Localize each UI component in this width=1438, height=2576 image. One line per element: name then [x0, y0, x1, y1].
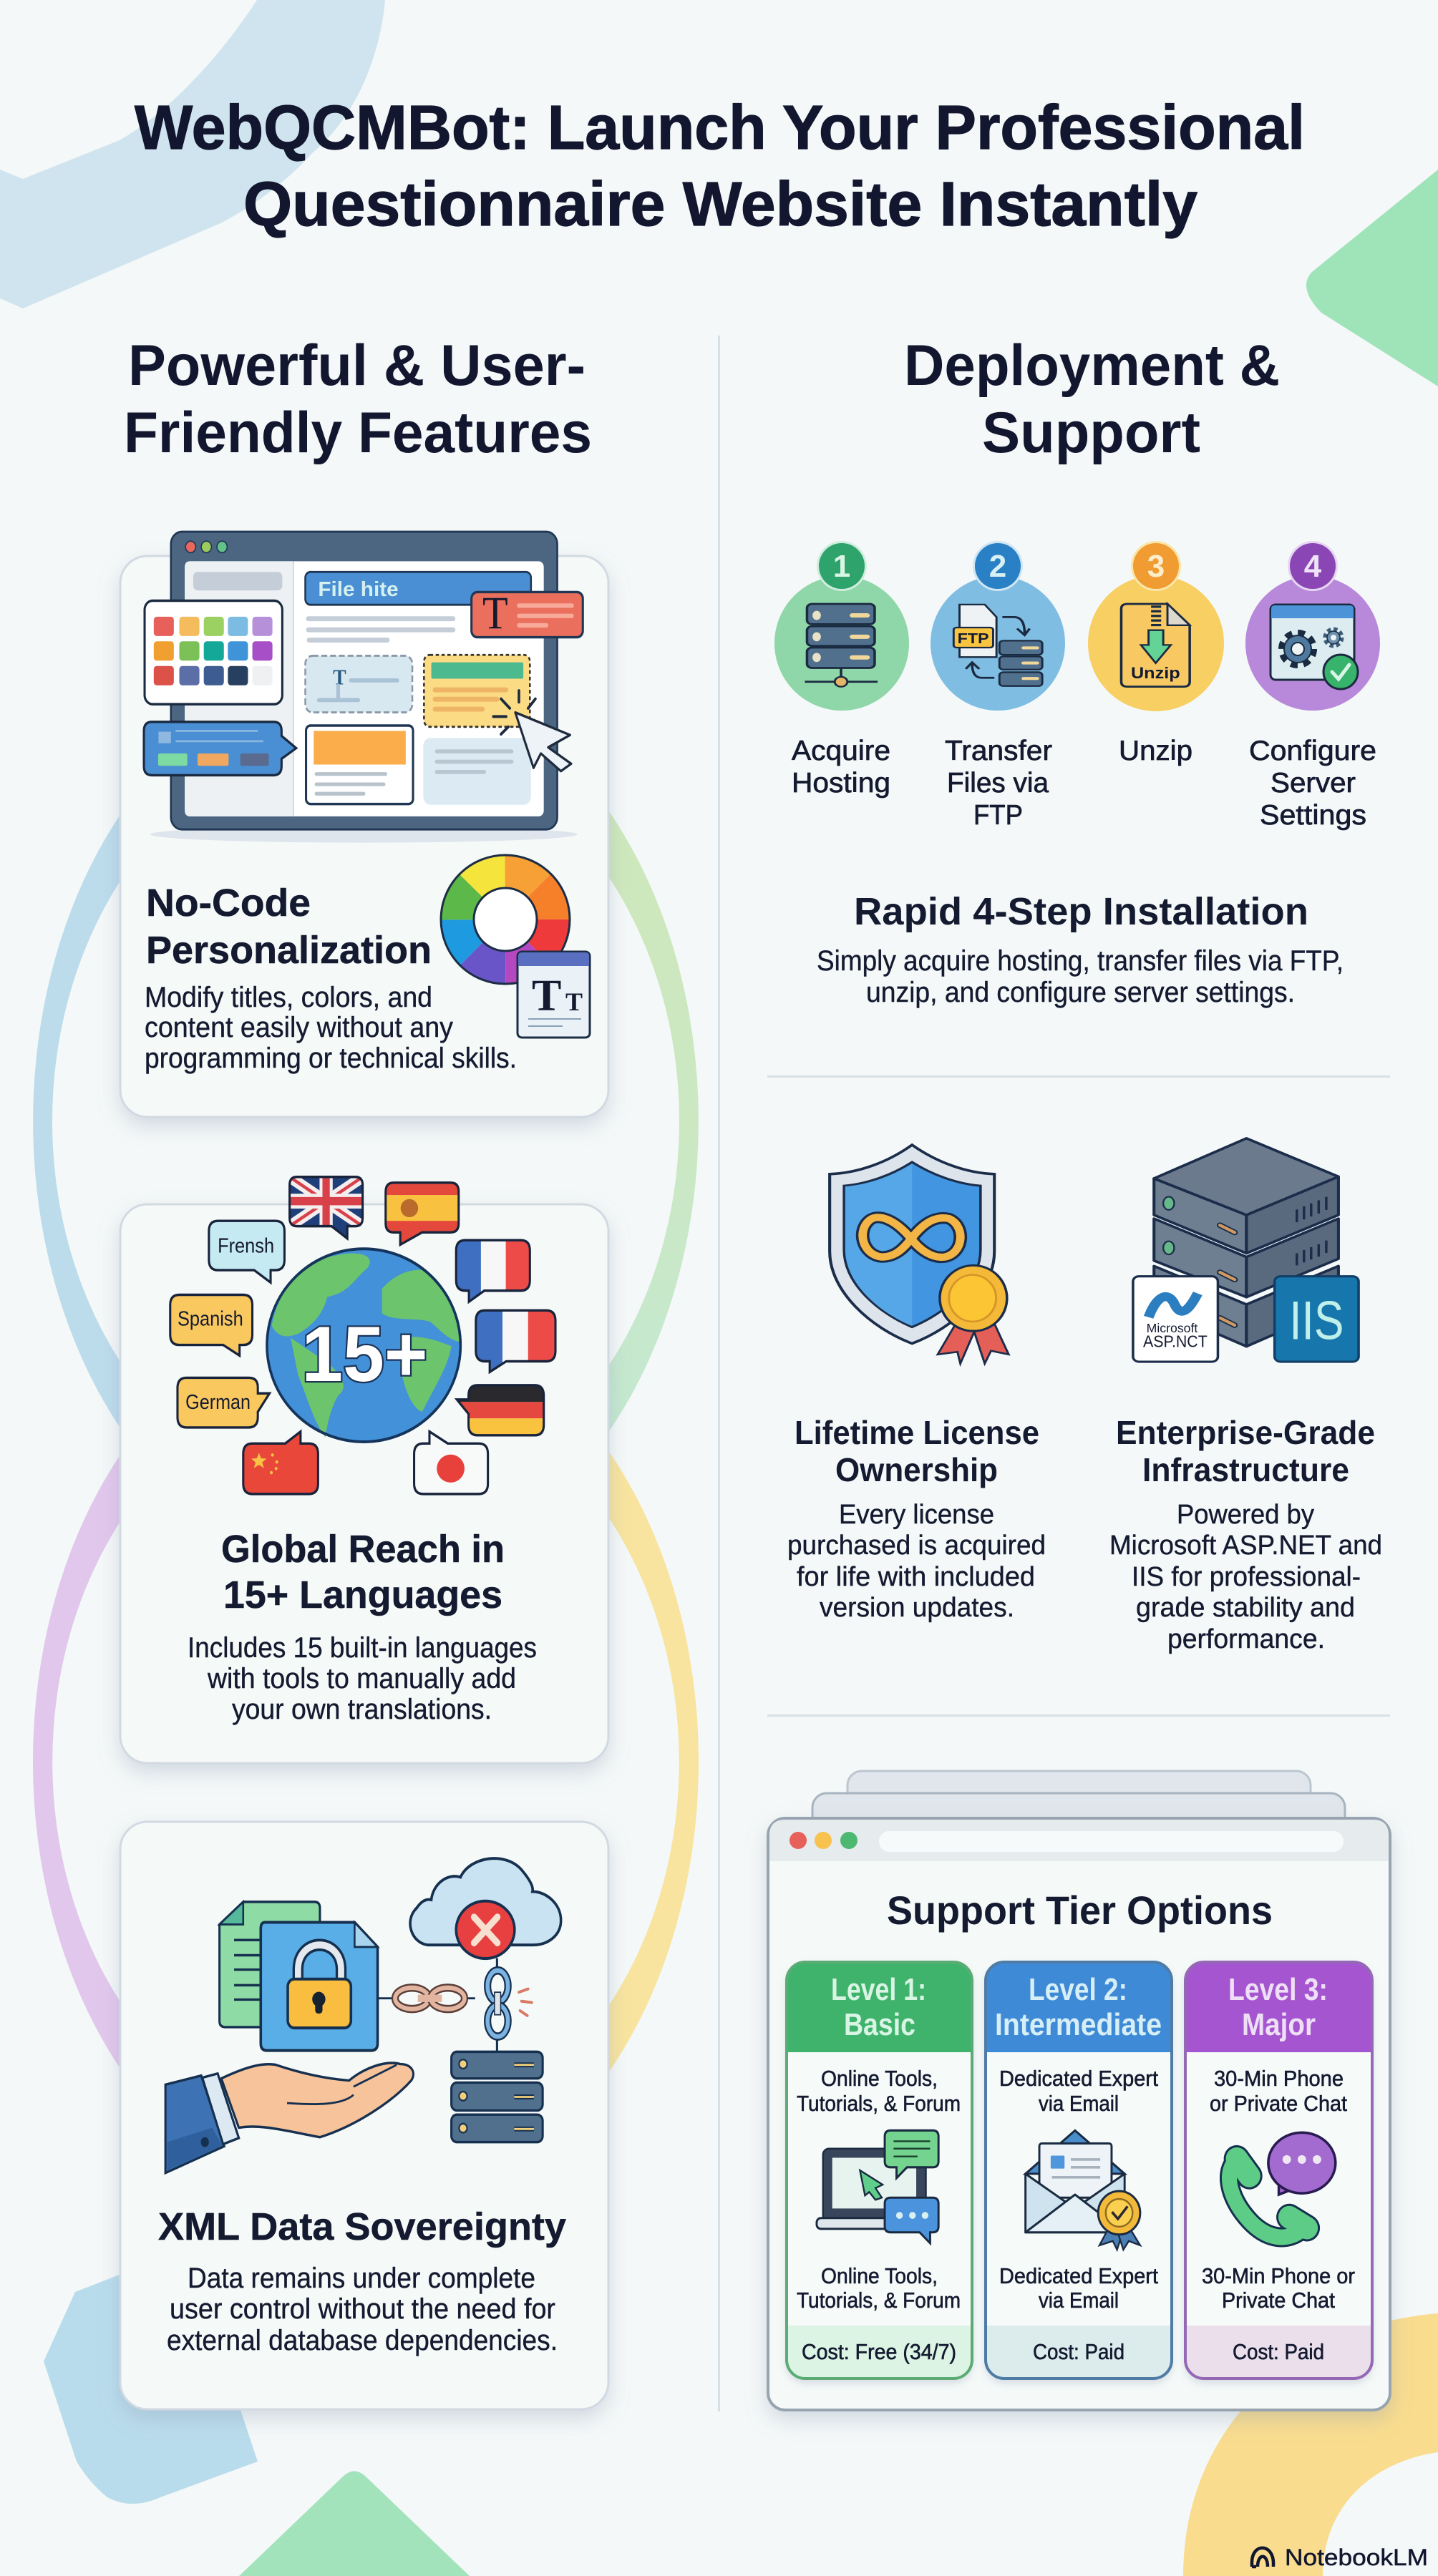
text: for life with included	[797, 1562, 1035, 1592]
illustration: browser editor: T	[333, 665, 346, 690]
text: IIS for professional-	[1132, 1562, 1361, 1592]
icon: settings window	[1271, 605, 1358, 689]
icon: green document	[220, 1902, 320, 2027]
icon: envelope with badge	[1026, 2130, 1140, 2250]
step circle	[931, 576, 1065, 711]
step badge	[817, 541, 867, 591]
bubble: Frensh: Frensh	[218, 1234, 274, 1257]
icon: locked blue document	[261, 1923, 378, 2051]
logo: ASP.NET: Microsoft	[1147, 1321, 1198, 1335]
bubble: Frensh	[209, 1221, 284, 1282]
icon: server stack with logos	[1133, 1138, 1359, 1362]
icon: FTP transfer: FTP	[958, 630, 989, 646]
card text: external database dependencies.	[167, 2325, 558, 2356]
card heading: No-Code	[146, 882, 311, 924]
icon: chain	[379, 1988, 475, 2009]
icon: FTP transfer	[953, 605, 1042, 686]
title	[135, 93, 1305, 239]
step badge	[1288, 541, 1338, 591]
card text	[188, 1632, 537, 1725]
tier text: Tutorials, & Forum	[797, 2091, 961, 2116]
enterprise infrastructure block	[1109, 1138, 1382, 1654]
browser title bar	[769, 1820, 1389, 1861]
icon: phone with chat	[1229, 2132, 1336, 2238]
text: Every license	[839, 1500, 994, 1530]
tier heading: Major	[1242, 2007, 1316, 2042]
step badge	[1131, 541, 1181, 591]
step label	[792, 736, 890, 799]
card heading: Global Reach in	[221, 1528, 505, 1571]
step label	[945, 736, 1052, 831]
heading: Support Tier Options	[887, 1888, 1273, 1933]
tier heading	[995, 1972, 1162, 2042]
step label	[1249, 736, 1376, 831]
tier text: Online Tools,	[821, 2066, 938, 2091]
bubble: German: German	[185, 1390, 251, 1413]
icon: vertical broken chain	[487, 1958, 532, 2051]
tier heading: Intermediate	[995, 2007, 1162, 2042]
tier text lower: 30-Min Phone or	[1202, 2263, 1355, 2288]
text: grade stability and	[1136, 1593, 1355, 1623]
step 1: acquire hosting	[774, 541, 909, 799]
tier text: 30-Min Phone	[1214, 2066, 1344, 2091]
icon: France flag bubble second	[476, 1310, 555, 1372]
browser back tabs	[812, 1771, 1345, 1843]
background shape: bottom-right yellow arc	[1183, 2313, 1438, 2576]
heading: left column: Powerful & User-	[128, 333, 586, 398]
tier text	[1210, 2066, 1347, 2116]
icon: server	[805, 604, 878, 687]
step label: Server	[1271, 768, 1356, 799]
tier 3: major	[1185, 1962, 1372, 2379]
icon: UK flag bubble	[290, 1177, 363, 1239]
step circle	[1245, 576, 1380, 711]
card text	[167, 2263, 558, 2356]
card heading: 15+ Languages	[223, 1574, 502, 1616]
card heading	[146, 882, 432, 972]
text: installation description	[817, 945, 1344, 1008]
step label: Files via	[947, 768, 1049, 799]
text	[1109, 1500, 1382, 1654]
tier heading: Level 3:	[1228, 1972, 1328, 2007]
step label: Hosting	[792, 768, 890, 799]
heading: Lifetime License	[795, 1414, 1039, 1451]
bubble: German	[178, 1377, 270, 1428]
step badge: 3	[1147, 549, 1165, 584]
illustration: browser editor: File hite	[318, 577, 399, 601]
icon: France flag bubble	[456, 1240, 530, 1302]
lifetime license block	[787, 1145, 1046, 1623]
card text	[145, 982, 517, 1074]
step label: Configure	[1249, 736, 1376, 766]
tier text: or Private Chat	[1210, 2091, 1347, 2116]
step badge: 2	[989, 549, 1006, 584]
icon: Japan flag bubble	[414, 1432, 488, 1494]
tier text lower: via Email	[1039, 2288, 1119, 2313]
card text: user control without the need for	[170, 2293, 555, 2325]
bubble: Spanish: Spanish	[178, 1307, 243, 1330]
icon: open hand	[165, 2063, 413, 2173]
tier heading: Level 2:	[1029, 1972, 1127, 2007]
card text: Data remains under complete	[188, 2263, 535, 2294]
card text: Includes 15 built-in languages	[188, 1632, 537, 1664]
icon: Spain flag bubble	[386, 1183, 459, 1244]
card text: content easily without any	[145, 1012, 453, 1043]
icon: globe: 15+	[301, 1311, 427, 1397]
illustration: browser editor: T	[482, 588, 508, 639]
tier cost: Cost: Free (34/7)	[802, 2339, 956, 2364]
heading: right column: Deployment &	[904, 333, 1280, 398]
icon: unzip file: Unzip	[1131, 665, 1180, 682]
tier text: via Email	[1039, 2091, 1119, 2116]
tier text lower: Online Tools,	[821, 2263, 938, 2288]
card heading: Personalization	[146, 929, 432, 972]
icon: unzip file	[1121, 604, 1190, 687]
step label: Unzip	[1119, 736, 1192, 766]
text: Powered by	[1177, 1500, 1314, 1530]
background shape: top-left blue band	[0, 0, 385, 308]
icon: typography window	[518, 952, 590, 1038]
step circle	[1088, 575, 1224, 711]
card text: programming or technical skills.	[145, 1043, 517, 1074]
step label: FTP	[973, 800, 1023, 831]
heading: right column	[904, 333, 1280, 465]
logo: ASP.NET: ASP.NCT	[1143, 1332, 1208, 1351]
icon: shield with medal	[830, 1145, 1009, 1364]
palette	[145, 600, 282, 704]
icon: server stack	[452, 2051, 543, 2142]
icon: typography window: T	[565, 987, 583, 1016]
logo: ASP.NET	[1133, 1277, 1218, 1362]
icon: color wheel	[441, 855, 570, 984]
tier text lower	[1202, 2263, 1355, 2313]
heading	[795, 1414, 1039, 1488]
panel: no-code personalization	[120, 532, 608, 1117]
text: version updates.	[820, 1593, 1014, 1623]
text: purchased is acquired	[787, 1531, 1046, 1561]
tier text	[999, 2066, 1158, 2116]
icon: Germany flag bubble	[457, 1385, 545, 1435]
background ring lower	[33, 1307, 699, 2216]
background shape: lower-left blue hexagon	[44, 2268, 258, 2504]
tier text lower: Private Chat	[1222, 2288, 1335, 2313]
heading: left column: Friendly Features	[124, 401, 592, 465]
heading: rapid installation: Rapid 4-Step Installation	[854, 890, 1308, 933]
panel: global reach	[120, 1177, 608, 1763]
text: installation description: Simply acquire hosting, transfer files via FTP,	[817, 945, 1344, 977]
tier heading: Basic	[844, 2007, 915, 2042]
heading: Infrastructure	[1142, 1451, 1349, 1488]
text: installation description: unzip, and configure server settings.	[866, 977, 1295, 1008]
tier heading: Level 1:	[831, 1972, 926, 2007]
tier heading	[831, 1972, 926, 2042]
settings speech bubble	[144, 722, 296, 775]
background shape: right green	[1306, 170, 1438, 386]
tier text lower	[797, 2263, 961, 2313]
logo: IIS	[1275, 1277, 1359, 1362]
background shape: bottom green triangle	[239, 2472, 470, 2576]
tier cost: Cost: Paid	[1233, 2339, 1324, 2364]
step label: Acquire	[792, 736, 890, 766]
background ring upper	[33, 667, 699, 1576]
text	[787, 1500, 1046, 1623]
step badge: 4	[1304, 549, 1322, 584]
heading: Ownership	[835, 1451, 998, 1488]
NotebookLM logo: NotebookLM	[1285, 2545, 1428, 2570]
step label: Settings	[1260, 800, 1366, 831]
card heading: XML Data Sovereignty	[158, 2205, 566, 2248]
icon: globe	[267, 1249, 460, 1442]
illustration: data locked in hand	[165, 1858, 561, 2173]
bubble: Spanish	[170, 1295, 253, 1355]
tier cost: Cost: Paid	[1033, 2339, 1124, 2364]
text: Microsoft ASP.NET and	[1109, 1531, 1382, 1561]
panel: XML data sovereignty	[120, 1822, 608, 2409]
heading	[1116, 1414, 1375, 1488]
step 3: unzip	[1088, 541, 1224, 766]
tier text	[797, 2066, 961, 2116]
tier 2: intermediate	[986, 1962, 1172, 2379]
heading: left column	[124, 333, 592, 465]
tier text lower: Tutorials, & Forum	[797, 2288, 961, 2313]
tier text lower: Dedicated Expert	[999, 2263, 1158, 2288]
heading: right column: Support	[982, 401, 1200, 465]
panel: support tier options	[768, 1771, 1390, 2410]
heading: Enterprise-Grade	[1116, 1414, 1375, 1451]
card text: with tools to manually add	[207, 1663, 516, 1694]
illustration: browser editor	[144, 532, 583, 843]
illustration: globe with language bubbles	[170, 1177, 555, 1494]
title: Questionnaire Website Instantly	[243, 170, 1197, 239]
step circle	[774, 576, 909, 711]
tier text: Dedicated Expert	[999, 2066, 1158, 2091]
step badge: 1	[833, 549, 850, 584]
text: performance.	[1167, 1624, 1325, 1654]
icon: China flag bubble	[243, 1432, 318, 1494]
column divider	[718, 336, 720, 2411]
card heading	[221, 1528, 505, 1616]
icon: cloud with X	[410, 1858, 561, 1958]
tier text lower	[999, 2263, 1158, 2313]
step label: Transfer	[945, 736, 1052, 766]
step badge	[973, 541, 1023, 591]
step 4: configure server settings	[1245, 541, 1380, 831]
icon: typography window: T	[532, 972, 561, 1020]
tier 1: basic	[787, 1962, 972, 2379]
card text: Modify titles, colors, and	[145, 982, 432, 1013]
title: WebQCMBot: Launch Your Professional	[135, 93, 1305, 162]
step 2: transfer files via FTP	[931, 541, 1065, 831]
logo: IIS: IIS	[1289, 1290, 1344, 1351]
icon: laptop with chat	[817, 2130, 938, 2243]
card text: your own translations.	[232, 1694, 492, 1725]
tier heading	[1228, 1972, 1328, 2042]
